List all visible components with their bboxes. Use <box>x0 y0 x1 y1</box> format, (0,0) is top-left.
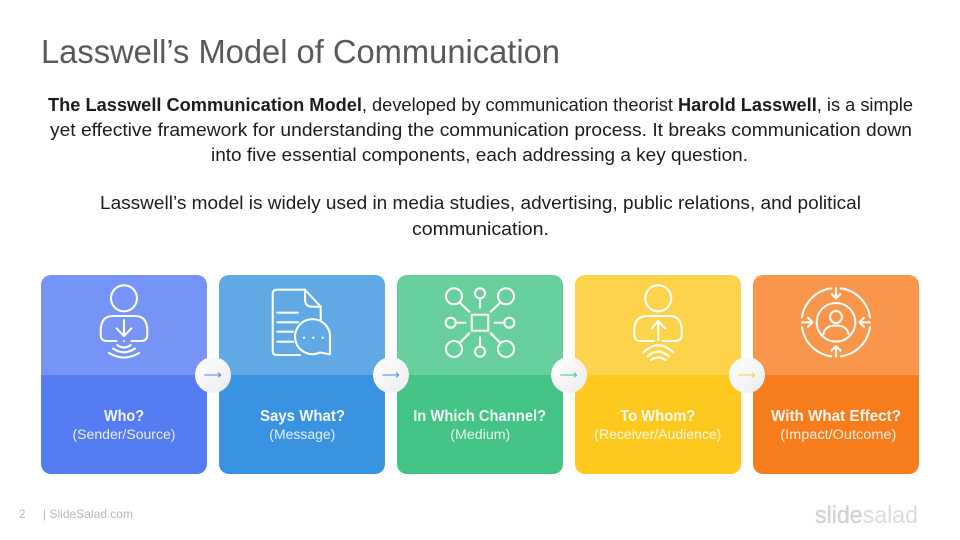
icon: impact cycle person <box>802 288 870 356</box>
icon: document with speech bubble <box>273 290 330 355</box>
label: says what: Says What? <box>260 408 345 425</box>
sublabel: sender: (Sender/Source) <box>72 427 176 442</box>
icon: channel network <box>446 288 514 357</box>
arrow: who to says what <box>195 357 231 393</box>
sublabel: impact: (Impact/Outcome) <box>780 427 896 442</box>
panel: in which channel <box>397 275 563 474</box>
intro paragraph: into five essential components, each addressing a key question. <box>211 145 748 165</box>
footer logo: slidesalad <box>815 502 918 529</box>
label: to whom: To Whom? <box>620 408 695 425</box>
label: in which channel: In Which Channel? <box>413 408 546 425</box>
sublabel: message: (Message) <box>269 427 335 442</box>
title: Lasswell’s Model of Communication <box>41 33 560 70</box>
arrow: says what to channel <box>373 357 409 393</box>
label: with what effect: With What Effect? <box>771 408 901 425</box>
footer site name: | SlideSalad.com <box>43 507 133 521</box>
panel: with what effect <box>753 275 919 474</box>
intro paragraph <box>48 95 913 165</box>
usage paragraph <box>100 193 861 239</box>
page number: 2 <box>19 509 25 521</box>
sublabel: receiver: (Receiver/Audience) <box>594 427 721 442</box>
arrow: whom to effect <box>729 357 765 393</box>
usage paragraph: Lasswell’s model is widely used in media studies, advertising, public relations, and political <box>100 193 861 213</box>
arrow: channel to whom <box>551 357 587 393</box>
panel: who <box>41 275 207 474</box>
sublabel: medium: (Medium) <box>450 427 510 442</box>
intro paragraph: yet effective framework for understanding the communication process. It breaks communication down <box>50 120 912 140</box>
intro paragraph: The Lasswell Communication Model, developed by communication theorist Harold Lasswell, is a simple <box>48 95 913 115</box>
icon: sender person <box>101 285 147 358</box>
label: who: Who? <box>104 408 144 425</box>
icon: receiver person <box>634 285 682 360</box>
usage paragraph: communication. <box>412 219 549 239</box>
panel: says what <box>219 275 385 474</box>
panel: to whom <box>575 275 741 474</box>
